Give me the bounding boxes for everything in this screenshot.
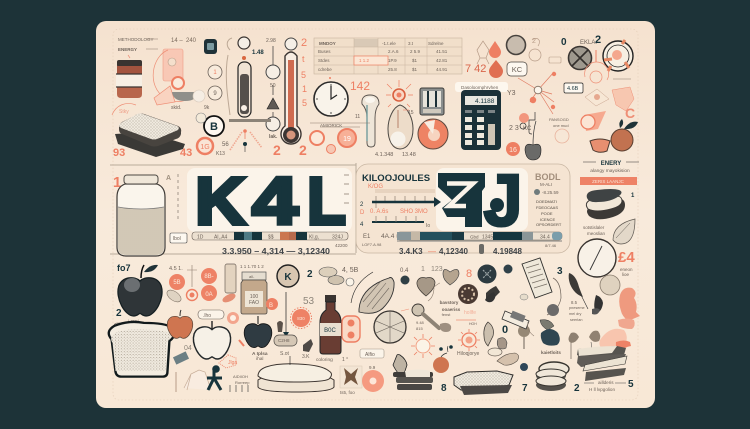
colour strip right: 8/7.46	[545, 243, 557, 248]
icon: small square badge and gauges	[204, 38, 232, 115]
icon: jar of preserve	[116, 55, 142, 98]
panel label: energy: ZERIS LAANJC	[592, 179, 625, 184]
icon: slab of bread	[115, 114, 185, 157]
chart: conversion arrows: 4	[360, 222, 364, 228]
chart: conversion arrows	[360, 184, 441, 229]
icon: K badge and arrow: 2	[307, 269, 313, 280]
colour strip left: Al,.A4	[214, 234, 228, 240]
label pill under apple: l..neerl	[128, 319, 139, 323]
icon: coral squirrel and shell	[599, 288, 640, 352]
chart: conversion arrows: K/OG	[368, 184, 383, 190]
icon: note cards and dark produce: kaietloits	[541, 350, 561, 355]
icon: calculator	[455, 82, 508, 150]
text block: right of KJ: ICENCE	[540, 217, 555, 222]
numbers under KJ: —	[428, 247, 436, 256]
small stat marks beside jar: A	[166, 175, 171, 182]
icon: ridged shell	[351, 272, 394, 313]
colour strip left: 42200	[335, 243, 348, 248]
chart: conversion arrows: Io	[426, 223, 430, 229]
icon: large red thermometer: t	[302, 54, 305, 64]
icon: bracket food sketch: ts5, foo	[340, 390, 355, 395]
text block: right of KJ: M-ALI	[540, 182, 552, 187]
icon: compass clock: £4	[618, 249, 635, 266]
coral numbers left	[113, 142, 307, 159]
colour strip left: 324J	[332, 234, 343, 240]
icon: leaf and caption: meoslian	[587, 231, 606, 236]
icon: coral rings below table	[310, 129, 416, 158]
icon: stacked stones	[586, 189, 635, 219]
icon: cherry and coral badge: KC	[523, 126, 532, 132]
top left labels	[118, 37, 197, 52]
icon: compass clock: eneon	[620, 267, 633, 272]
icon: peach and slice	[590, 119, 638, 152]
icon: big sample jar: 1	[113, 174, 121, 191]
icon: tomato and white apple	[167, 310, 239, 359]
icon: leaves and nuts	[484, 322, 530, 365]
icon: network diagram: 2 3	[509, 125, 519, 132]
title: KAL	[195, 164, 346, 239]
icon: network diagram	[507, 72, 556, 134]
icon: glass tube	[310, 95, 379, 147]
icon: K badge and arrow: S.ot	[280, 351, 290, 357]
colour strip right: 4A.4	[381, 233, 395, 240]
icon: walking figures: Rorreep	[235, 380, 250, 385]
icon: right side sketches and fruit	[549, 62, 635, 143]
table: values: 1 1.2	[359, 58, 370, 63]
icon: avocado: 15	[408, 110, 414, 116]
coral numbers left: 93	[113, 147, 125, 159]
icon: heart and small dark items	[400, 264, 512, 304]
icon: coral badges cluster	[165, 265, 237, 304]
table: values: $1	[412, 58, 418, 63]
table: values: 1P.9	[388, 58, 397, 63]
icon: large dark apple: fo7	[117, 263, 130, 273]
small stat marks beside jar: lbol	[173, 236, 181, 242]
icon: glass tube: AMIORICK	[320, 123, 342, 128]
chart: conversion arrows: 2	[360, 202, 364, 208]
coral numbers left: 2	[273, 142, 281, 158]
icon: stacked flatbreads bottom right: H ll lvpgolion	[589, 387, 615, 392]
icon: wooden spoon: HOH	[469, 322, 477, 326]
icon: stacked flatbreads bottom right: 5	[628, 379, 634, 390]
icon: coral badges cluster: 8B-	[204, 274, 214, 280]
icon: suns	[411, 329, 480, 373]
icon: heart and small dark items: 123	[431, 266, 443, 273]
icon: dark gauge box	[420, 88, 444, 115]
background panel	[96, 21, 655, 408]
title: KAL: K	[195, 164, 246, 239]
text block: right of KJ: OPSORDERT	[536, 222, 562, 227]
icon: pink sketch with ring: skid.	[171, 105, 181, 111]
icon: sketched figures and drops	[465, 36, 561, 78]
chart: conversion arrows: 0. A.6s	[370, 209, 388, 215]
title: KAL: 4	[252, 164, 298, 239]
icon: small dark apple and bottle	[239, 316, 272, 362]
icon: wall clock: 142	[350, 79, 370, 93]
table: values: Buses	[318, 49, 331, 54]
icon: cherry and coral badge: 16	[509, 147, 517, 154]
top left labels: 240	[186, 38, 197, 44]
icon: wheels top right: EKLA.	[580, 40, 597, 46]
icon: calculator: Dasoloomphrvhen	[461, 85, 499, 90]
icon: cherry and coral badge	[506, 121, 541, 160]
icon: jar with label: FAO	[249, 300, 259, 306]
colour strip right	[362, 232, 562, 248]
icon: flat bread loaf	[258, 356, 334, 392]
icon: dark sliced stacks along bottom: 8	[441, 383, 447, 394]
icon: beans and pill: 4, 5B	[342, 267, 359, 274]
icon: large red thermometer	[281, 37, 307, 144]
icon: stacked stones: 1	[631, 193, 635, 199]
title: KAL: L	[307, 164, 346, 239]
icon: coral ring and letter badge	[196, 113, 229, 157]
icon: sketched figures and drops: 2	[532, 38, 536, 45]
icon: K badge and arrow: C2H8	[278, 338, 290, 343]
icon: right side sketches and fruit: 4.6B	[567, 86, 579, 92]
table: values: -1.t.ele	[382, 41, 396, 46]
panel label: energy: alangy mayokision	[590, 168, 630, 174]
icon: avocado	[388, 105, 414, 149]
icon: stacked flatbreads bottom right: aillderis	[598, 380, 614, 385]
centre band rules	[110, 163, 570, 254]
icon: citrus wheel	[374, 311, 406, 343]
icon: calculator: 4.1188	[475, 98, 495, 105]
icon: K badge and arrow: 3.K	[302, 354, 310, 360]
icon: coral ring and letter badge: 1G	[200, 144, 210, 151]
numbers under KJ	[399, 244, 522, 256]
icon: sun gauge	[386, 80, 413, 107]
icon: coral rings below table: 4.1.348	[375, 152, 393, 158]
icon: K badge and arrow: K	[284, 272, 292, 283]
icon: balance stack with balls: 50	[270, 83, 276, 89]
icon: sketched figures and drops: KC	[512, 65, 523, 74]
icon: right side sketches and fruit: PANSOGD	[549, 117, 569, 122]
heading: kilojoules: KILOOJOULES	[362, 173, 430, 184]
label pill under apple: Lnatgg agpaao	[117, 326, 148, 330]
text block: right of KJ: BODL	[535, 172, 561, 182]
icon: jar with label	[225, 264, 267, 314]
icon: network diagram: Y3	[507, 90, 516, 97]
colour strip left: Kl,g,	[309, 234, 319, 240]
icon: wooden spoon: hollfe	[464, 310, 476, 316]
icon: compass clock: lioe	[622, 272, 630, 277]
icon: jar with label: 1 1 1.70 1 2	[240, 264, 264, 269]
icon: bread slice	[109, 322, 174, 377]
icon: walking figures	[173, 351, 250, 392]
table: values: cdrebe	[318, 67, 332, 72]
icon: sauce bottle: 1 °	[342, 357, 348, 363]
text block: right of KJ: -8.25.59	[542, 190, 559, 195]
icon: dark leaf sprigs and caption: mel dry	[569, 312, 582, 316]
top left labels: METHODOLOGY	[118, 37, 154, 42]
icon: heart and small dark items: 8	[466, 268, 472, 280]
icon: coral ring and letter badge: 56	[222, 142, 229, 148]
icon: dark thermometer	[238, 37, 264, 117]
icon: coral ring and letter badge: B	[210, 121, 218, 133]
icon: K badge and arrow: B	[269, 303, 273, 309]
icon: coral badges cluster: 0A	[205, 292, 213, 298]
icon: leaf and caption	[583, 219, 635, 244]
icon: heart and small dark items: 1	[421, 266, 425, 273]
icon: coral badges cluster: 4.5 1.	[169, 266, 183, 272]
label pill under apple	[114, 319, 156, 332]
icon: stacked flatbreads bottom right: 2	[574, 383, 580, 394]
table: values: $1	[412, 67, 418, 72]
icon: large dark apple: 2	[116, 308, 122, 319]
icon: coral tablet	[342, 316, 384, 358]
colour strip left	[192, 232, 348, 248]
chart: conversion arrows: SHO 3MO	[400, 209, 428, 215]
icon: suns: Hiloqjorye	[457, 351, 479, 357]
table: values: Stdes	[318, 58, 330, 63]
icon: note cards and dark produce	[502, 258, 563, 355]
icon: glass tube: 11	[355, 114, 360, 120]
icon: balance stack with balls: 2.98	[266, 38, 276, 44]
icon: coral ring and letter badge: K13	[216, 151, 225, 157]
icon: K badge and arrow: 830	[297, 316, 305, 321]
numbers under KJ: 3.4.K3	[399, 247, 423, 256]
icon: jar with label: all-	[249, 274, 255, 279]
icon: wooden spoon: 815	[416, 326, 423, 331]
icon: small dark apple and bottle: A Iplsa	[252, 351, 268, 357]
icon: balance stack with balls: lak.	[269, 134, 278, 140]
title: KJ mark	[438, 159, 523, 242]
icon: sketched figures and drops: 7 42	[465, 63, 486, 75]
numbers under KJ: 4,12340	[439, 247, 468, 256]
icon: dark thermometer: 1.48	[252, 50, 264, 56]
icon: large red thermometer: 5	[302, 98, 307, 108]
top left labels: 14 –	[171, 38, 183, 44]
icon: wooden spoon	[401, 283, 477, 332]
icon: beans and pill	[319, 267, 359, 286]
colour strip right: E1	[363, 234, 371, 240]
table: values	[314, 38, 462, 74]
icon: sauce bottle: 53	[303, 296, 315, 307]
text block: right of KJ	[534, 172, 562, 227]
icon: sauce bottle: coloring	[316, 357, 333, 363]
top left labels: ENERGY	[118, 47, 137, 52]
icon: balance stack with balls	[229, 38, 280, 152]
icon: heart and small dark items: 0.4	[400, 268, 409, 274]
icon: big sample jar	[113, 174, 165, 256]
icon: pink sketch with ring: 9k	[204, 105, 210, 111]
icon: stacked flatbreads bottom right	[574, 346, 634, 394]
icon: walking figures: Jlga	[228, 360, 237, 366]
colour strip right: 1345	[482, 234, 493, 240]
icon: sauce bottle	[303, 295, 348, 363]
icon: wheels top right	[561, 34, 633, 71]
icon: compass clock	[578, 239, 635, 277]
icon: wooden spoon: 9.48	[416, 320, 425, 325]
panel label: energy	[580, 161, 639, 185]
icon: right side sketches and fruit: C	[625, 105, 635, 121]
side marks right of KAL	[344, 175, 349, 203]
icon: walking figures: AIDIIOH	[233, 374, 248, 379]
text block: right of KJ: DOEDMATI	[536, 199, 557, 204]
icon: wooden spoon: fenst	[442, 312, 451, 317]
icon: leaves and nuts: 0	[502, 324, 508, 336]
icon: coral badges cluster: 5B	[173, 280, 181, 286]
icon: bracket food sketch: 9.9	[369, 365, 376, 370]
table: values: 44.91	[436, 67, 448, 72]
icon: K badge and arrow	[266, 265, 313, 360]
icon: large red thermometer: 5	[301, 70, 306, 80]
icon: pink sketch with ring: Stky	[119, 109, 129, 115]
icon: note cards and dark produce: 3	[557, 266, 563, 277]
table: values: 42.81	[436, 58, 448, 63]
icon: dark sliced stacks along bottom: 7	[522, 383, 528, 394]
icon: wheels top right: 2	[595, 34, 601, 46]
icon: bracket food sketch	[340, 365, 384, 395]
icon: small square badge and gauges: 9	[213, 91, 217, 97]
icon: leaf and caption: sotstislaler	[583, 225, 605, 230]
text block: right of KJ: POOE	[541, 211, 553, 216]
icon: large dark apple	[116, 263, 162, 319]
icon: coral tablet: Alfio	[365, 352, 375, 358]
icon: sliced pie disc	[418, 119, 448, 149]
table: values: 41.51	[436, 49, 448, 54]
icon: dark sliced stacks along bottom	[393, 354, 569, 395]
table: values: 2.A.6	[388, 49, 399, 54]
coral numbers left: 2	[299, 142, 307, 158]
icon: small square badge and gauges: 1	[213, 70, 217, 76]
icon: wheels top right: 0	[561, 37, 567, 48]
panel label: energy: ENERY	[601, 161, 621, 167]
colour strip right: Gbd	[470, 234, 479, 240]
numbers under KJ: 4.19848	[493, 247, 522, 256]
colour strip left: 1D	[197, 234, 204, 240]
icon: dark leaf sprigs and caption: 8.5	[571, 300, 578, 305]
icon: coral rings below table: 13.48	[402, 152, 416, 158]
icon: right side sketches and fruit: one mud	[553, 123, 569, 128]
colour strip right: 34.4	[540, 234, 550, 240]
text block: right of KJ: FDEOCAAS	[536, 205, 558, 210]
icon: tomato and white apple: .lho	[203, 313, 211, 319]
table: values: 3.t	[408, 41, 414, 46]
icon: dark leaf sprigs and caption: pneseme	[569, 306, 585, 310]
table: values: 2 5.9	[410, 49, 421, 54]
icon: tomato and white apple: 04	[184, 345, 192, 352]
colour strip right: LOF7.A.98	[362, 242, 382, 247]
icon: coral rings below table: 19	[343, 136, 351, 143]
title: KJ mark: J	[483, 159, 523, 242]
icon: small dark apple and bottle: ihal	[256, 356, 263, 362]
icon: jar with label: 100	[250, 294, 258, 300]
numbers under KAL: 3.3.950 – 4,314 — 3,12340	[222, 247, 331, 256]
icon: large red thermometer: 2	[301, 37, 307, 49]
icon: wooden spoon: bavstory	[440, 300, 459, 305]
icon: dark leaf sprigs and caption: seerlan	[570, 318, 582, 322]
chart: conversion arrows: D	[360, 210, 365, 216]
table: values: 25.8	[388, 67, 397, 72]
table: values: Sdrelne	[428, 41, 444, 46]
small stat marks beside jar	[166, 174, 187, 243]
icon: dark leaf sprigs and caption	[568, 273, 620, 359]
icon: wooden spoon: ooaeriss	[442, 307, 461, 312]
coral numbers left: 43	[180, 147, 192, 159]
icon: pink sketch with ring	[112, 49, 210, 115]
table: values: MNDOY	[319, 41, 336, 46]
colour strip left: $$	[268, 234, 274, 240]
icon: wall clock	[314, 77, 370, 116]
icon: sauce bottle: B0C	[324, 328, 337, 334]
icon: large red thermometer: 1	[302, 84, 307, 94]
